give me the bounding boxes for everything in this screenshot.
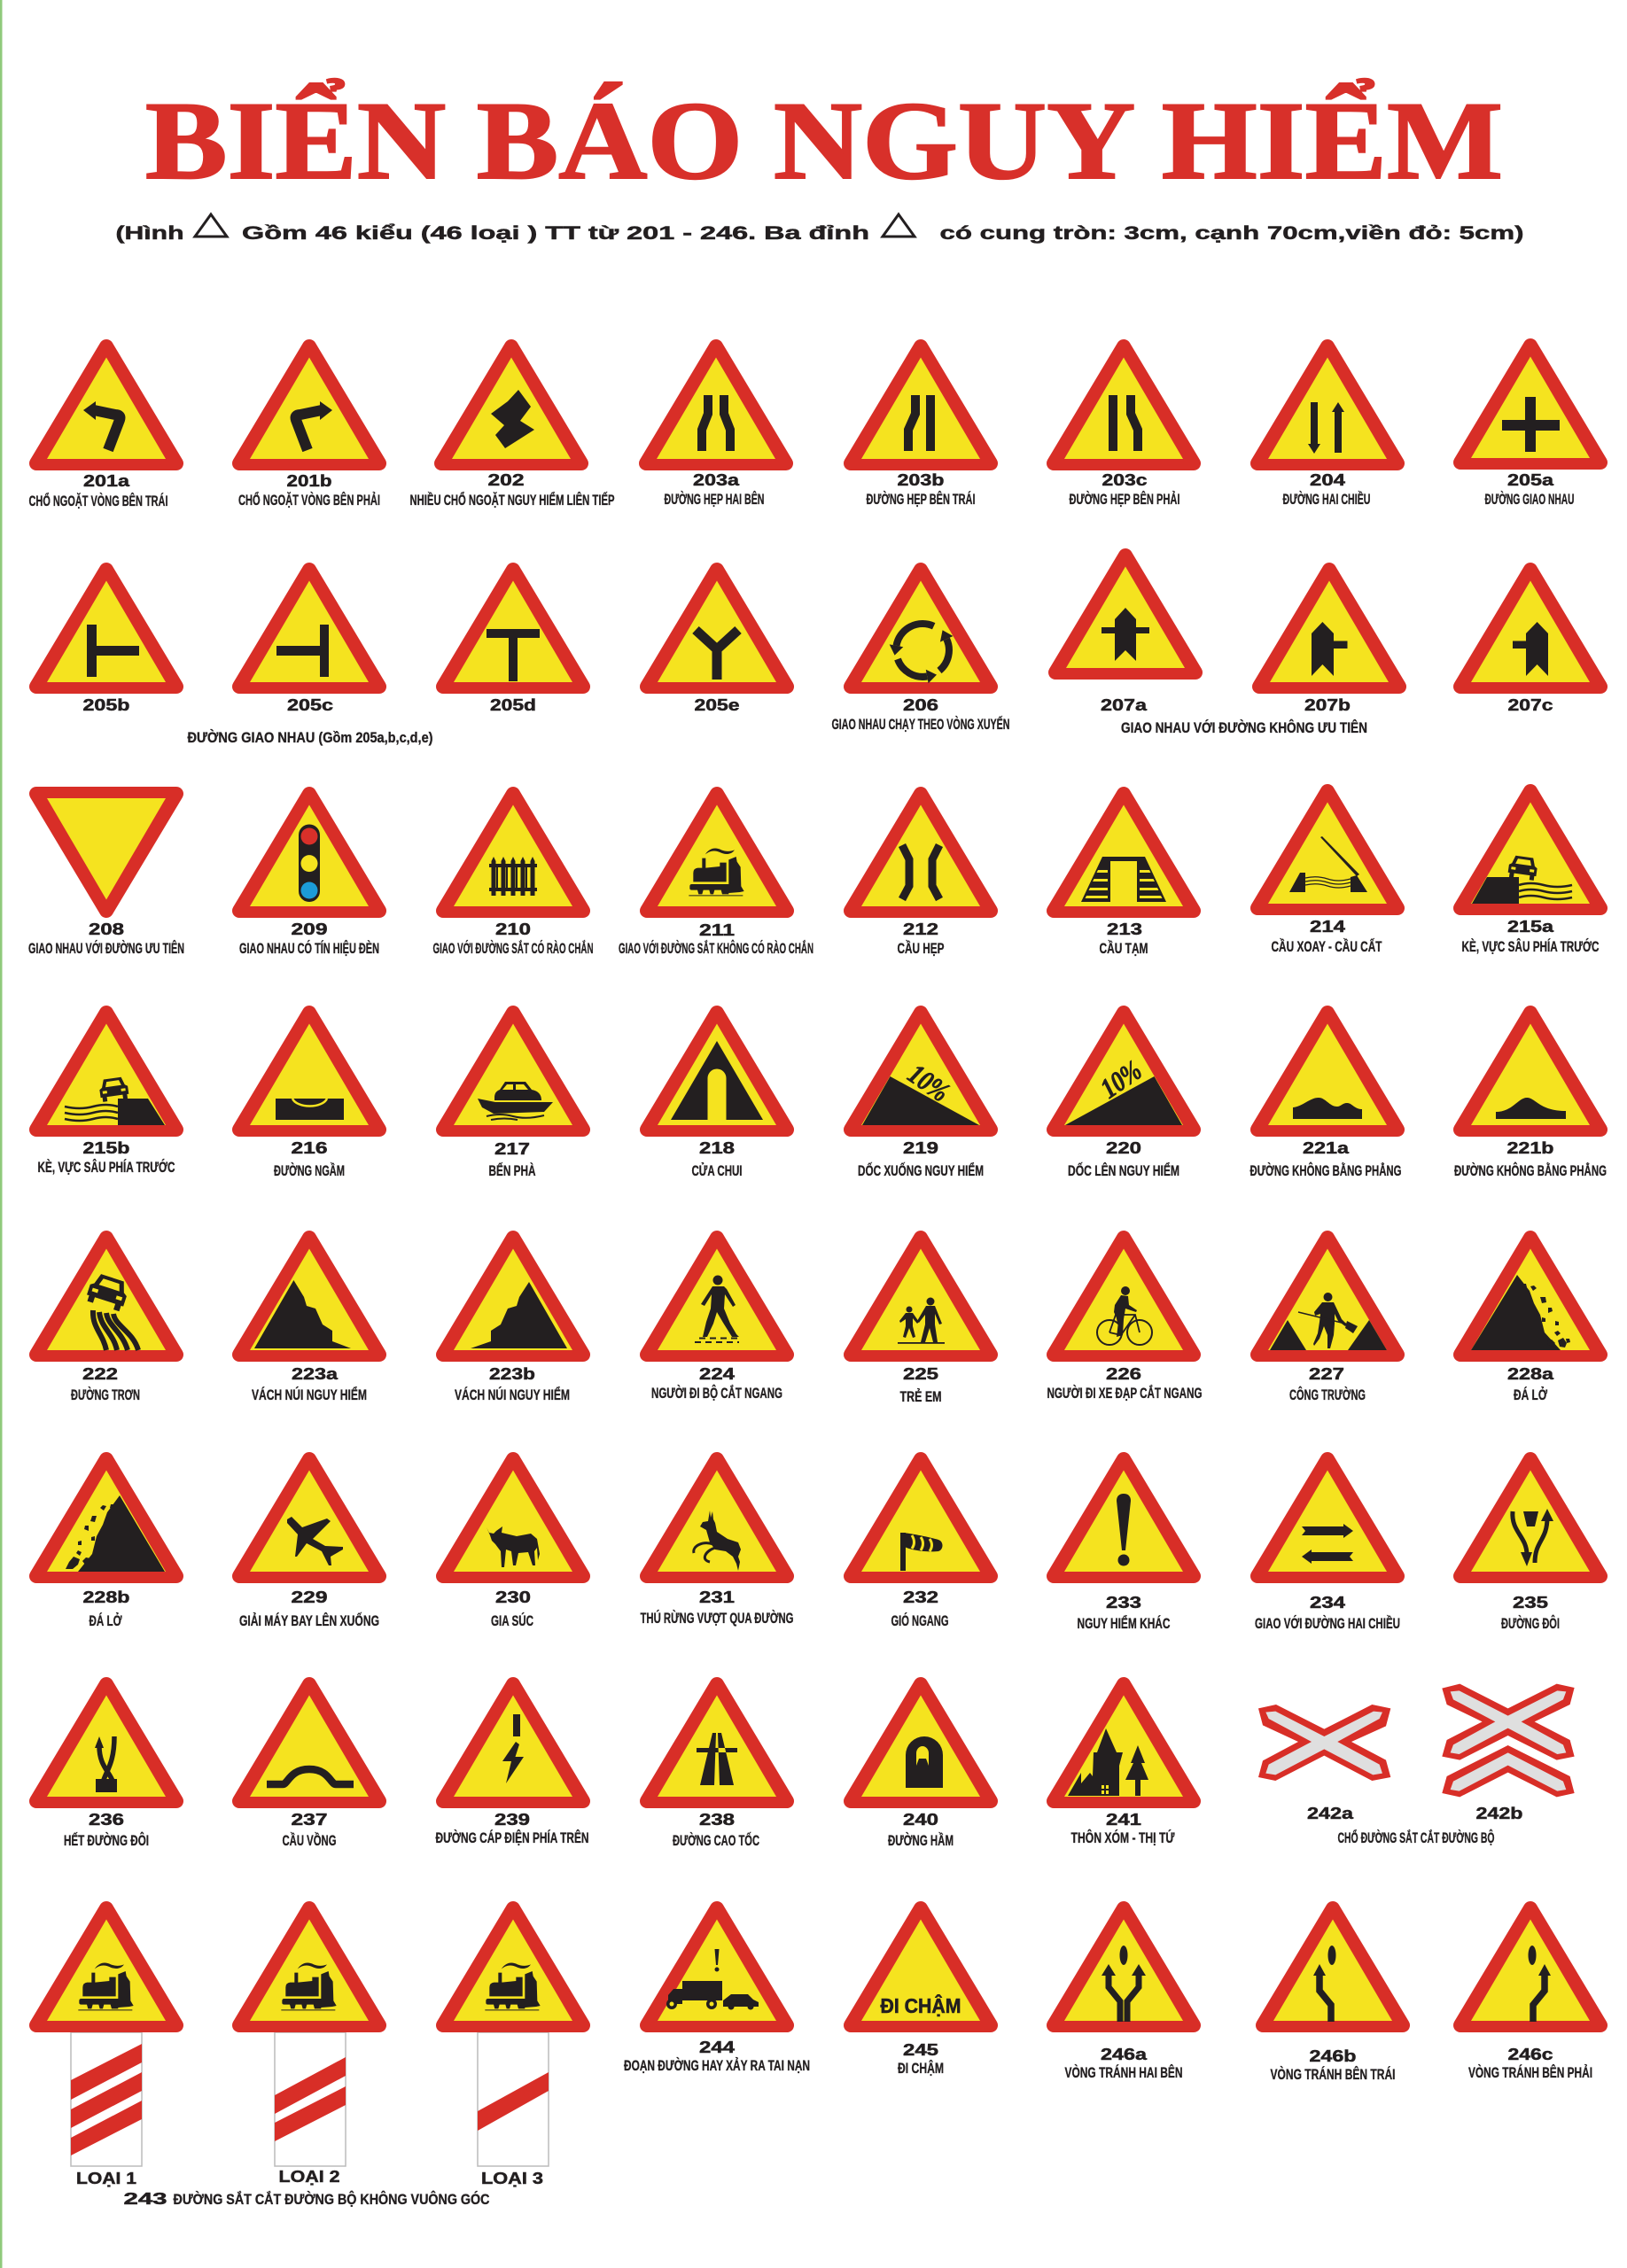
number: 242a (1307, 1805, 1354, 1822)
caption: GIẢI MÁY BAY LÊN XUỐNG (239, 1612, 379, 1629)
sign 213 (1054, 794, 1194, 957)
icon: steep ascent: 10% (1094, 1053, 1148, 1104)
subtitle (115, 214, 1524, 244)
icon: tunnel (851, 1684, 991, 1801)
subtitle: Gồm 46 kiểu (46 loại ) TT từ 201 - 246. Ba đỉnh (242, 223, 869, 244)
icon: two way crossing (1257, 1459, 1397, 1576)
caption: THÔN XÓM - THỊ TỨ (1070, 1829, 1175, 1846)
icon: slow text (851, 1908, 991, 2025)
number: 215a (1507, 918, 1554, 936)
caption: DỐC LÊN NGUY HIỂM (1068, 1161, 1179, 1179)
label: LOẠI 3 (481, 2170, 543, 2187)
number: 242b (1476, 1805, 1523, 1822)
icon: narrows both (646, 346, 786, 463)
number: 217 (494, 1140, 530, 1158)
caption: ĐƯỜNG HẦM (888, 1832, 954, 1849)
icon: inverted triangle (36, 794, 176, 911)
icon: traffic light (239, 794, 379, 911)
icon: overhead cable (443, 1684, 583, 1801)
label: LOẠI 2 (278, 2168, 340, 2186)
icon: roundabout (851, 570, 991, 687)
sign 209 (239, 794, 379, 957)
sign 206 (831, 570, 1010, 733)
caption: ĐI CHẬM (898, 2060, 944, 2077)
number: 226 (1106, 1365, 1141, 1383)
caption: ĐƯỜNG HẸP BÊN PHẢI (1069, 491, 1180, 508)
sign 223b (443, 1238, 583, 1403)
sign 232 (851, 1459, 991, 1629)
number: 207b (1304, 696, 1351, 714)
number: 221b (1506, 1139, 1554, 1157)
number: 237 (291, 1811, 328, 1829)
number: 206 (903, 696, 938, 714)
sign 245 (851, 1908, 991, 2077)
caption: CHỔ NGOẶT VÒNG BÊN TRÁI (28, 493, 168, 509)
icon: keep left (1263, 1908, 1403, 2025)
subtitle: (Hình (115, 223, 184, 244)
icon: quayside (1460, 791, 1600, 908)
number: 223b (489, 1365, 535, 1383)
icon: minor road right (1259, 570, 1399, 687)
icon: fence (443, 794, 583, 911)
sign 231 (640, 1459, 794, 1627)
icon: slippery road (36, 1238, 176, 1355)
icon: T junction (443, 570, 583, 687)
sign 228b (36, 1459, 176, 1629)
number: 246a (1101, 2046, 1148, 2063)
number: 214 (1310, 918, 1345, 936)
sign 241 (1054, 1684, 1194, 1846)
number: 212 (903, 920, 938, 938)
caption: TRẺ EM (900, 1388, 941, 1405)
icon: airplane (239, 1459, 379, 1576)
caption: KÈ, VỰC SÂU PHÍA TRƯỚC (37, 1159, 175, 1176)
icon: end of dual carriageway (36, 1684, 176, 1801)
caption: CẦU HẸP (897, 940, 945, 957)
number: 245 (903, 2041, 938, 2059)
number: 211 (699, 921, 735, 939)
sign 208 (28, 794, 184, 957)
sign 227 (1257, 1238, 1397, 1403)
icon: cattle (443, 1459, 583, 1576)
icon: train (239, 1908, 379, 2025)
sign 211 (619, 794, 814, 957)
sign 215a (1460, 791, 1600, 955)
caption: ĐƯỜNG HẸP HAI BÊN (665, 491, 764, 508)
sign 242a (1258, 1705, 1390, 1822)
icon: keep right (1460, 1908, 1600, 2025)
number: 228b (83, 1588, 130, 1606)
icon: cliff left (239, 1238, 379, 1355)
number: 204 (1310, 471, 1345, 489)
icon: side road left (239, 570, 379, 687)
sign 205c (239, 570, 379, 714)
caption: NGUY HIỂM KHÁC (1078, 1615, 1170, 1632)
number: 202 (487, 471, 525, 489)
caption: VÒNG TRÁNH BÊN TRÁI (1271, 2066, 1395, 2083)
number: 203c (1102, 471, 1147, 489)
number: 205b (83, 696, 130, 714)
number: 216 (291, 1139, 328, 1157)
icon: temporary bridge (1054, 794, 1194, 911)
sign 230 (443, 1459, 583, 1629)
icon: narrows left (851, 346, 991, 463)
sign 207b (1259, 570, 1399, 714)
number: 220 (1106, 1139, 1141, 1157)
number: 213 (1107, 920, 1142, 938)
number: 224 (699, 1365, 735, 1383)
number: 221a (1303, 1139, 1350, 1157)
number: 205a (1507, 471, 1554, 489)
sign 244 (624, 1908, 810, 2074)
sign 221b (1454, 1013, 1607, 1179)
sign 235 (1460, 1459, 1600, 1632)
caption: ĐƯỜNG CAO TỐC (673, 1831, 759, 1849)
sign 223a (239, 1238, 379, 1403)
caption: GIAO VỚI ĐƯỜNG SẮT KHÔNG CÓ RÀO CHẮN (619, 940, 814, 957)
sign 218 (647, 1013, 787, 1179)
post: three stripes (71, 2032, 142, 2166)
caption: NGƯỜI ĐI XE ĐẠP CẮT NGANG (1047, 1385, 1202, 1402)
caption: VÒNG TRÁNH HAI BÊN (1065, 2064, 1182, 2081)
number: 244 (699, 2039, 735, 2056)
sign 214 (1257, 791, 1397, 955)
sign 224 (647, 1238, 787, 1402)
number: 235 (1513, 1594, 1548, 1612)
sign 203c (1054, 346, 1194, 508)
icon: railway cross (1258, 1705, 1390, 1781)
icon: exclamation (1054, 1459, 1194, 1576)
icon: slow text: ĐI CHẬM (881, 1993, 961, 2017)
number: 207c (1508, 696, 1553, 714)
number: 241 (1106, 1811, 1141, 1829)
icon: crossroads (1460, 346, 1600, 462)
icon: train (647, 794, 787, 911)
sign 243 type 3 (443, 1908, 583, 2187)
number: 203b (897, 471, 945, 489)
caption: ĐƯỜNG KHÔNG BẰNG PHẲNG (1249, 1162, 1402, 1179)
caption: GIAO NHAU CÓ TÍN HIỆU ĐÈN (239, 940, 379, 957)
sign 217 (443, 1013, 583, 1179)
icon: steep descent: 10% (902, 1057, 955, 1107)
icon: minor crossroads (1055, 555, 1195, 672)
green left edge stripe (0, 0, 2, 2268)
icon: ford (239, 1013, 379, 1130)
sign 221a (1249, 1013, 1402, 1179)
caption: GIA SÚC (491, 1612, 533, 1629)
icon: roadworks (1257, 1238, 1397, 1355)
sign 202 (409, 346, 615, 509)
caption: CỬA CHUI (691, 1162, 743, 1179)
number: 223a (292, 1365, 339, 1383)
icon: curve left (36, 346, 176, 463)
number: 240 (903, 1811, 938, 1829)
number: 236 (89, 1811, 124, 1829)
caption: THÚ RỪNG VƯỢT QUA ĐƯỜNG (640, 1610, 794, 1627)
sign 246a (1054, 1908, 1194, 2081)
sign 205d (443, 570, 583, 714)
caption: NHIỀU CHỔ NGOẶT NGUY HIỂM LIÊN TIẾP (409, 492, 615, 509)
caption: ĐƯỜNG TRƠN (71, 1386, 140, 1403)
sign 236 (36, 1684, 176, 1849)
shared caption 207: GIAO NHAU VỚI ĐƯỜNG KHÔNG ƯU TIÊN (1121, 719, 1367, 736)
caption: CHỔ NGOẶT VÒNG BÊN PHẢI (238, 492, 380, 509)
icon: falling rocks right (1460, 1238, 1600, 1355)
number: 232 (903, 1588, 938, 1606)
number: 233 (1106, 1594, 1141, 1612)
sign 222 (36, 1238, 176, 1403)
number: 246b (1310, 2047, 1357, 2065)
icon: deer (647, 1459, 787, 1576)
icon: accident (647, 1908, 787, 2025)
number: 225 (903, 1365, 938, 1383)
caption: HẾT ĐƯỜNG ĐÔI (64, 1832, 149, 1849)
number: 205e (695, 696, 739, 714)
icon: dual carriageway (1460, 1459, 1600, 1576)
number: 201a (83, 472, 130, 490)
number: 231 (699, 1588, 735, 1606)
caption 243: 243 (124, 2190, 167, 2208)
sign 243 type 1 (36, 1908, 176, 2187)
icon: tunnel portal (647, 1013, 787, 1130)
number: 218 (699, 1139, 735, 1157)
caption: GIAO VỚI ĐƯỜNG SẮT CÓ RÀO CHẮN (432, 940, 594, 957)
sign 220 (1054, 1013, 1194, 1179)
caption 243: ĐƯỜNG SẮT CẮT ĐƯỜNG BỘ KHÔNG VUÔNG GÓC (174, 2191, 489, 2208)
number: 207a (1101, 696, 1148, 714)
icon: steep descent (851, 1013, 991, 1130)
icon: Y junction (647, 570, 787, 687)
sign 204 (1257, 346, 1397, 508)
number: 219 (903, 1139, 938, 1157)
number: 222 (82, 1365, 118, 1383)
number: 215b (83, 1139, 130, 1157)
caption: GIAO NHAU VỚI ĐƯỜNG ƯU TIÊN (28, 940, 184, 957)
icon: quayside mirrored (36, 1013, 176, 1130)
caption: VÁCH NÚI NGUY HIỂM (455, 1386, 570, 1403)
sign 229 (239, 1459, 379, 1629)
sign 205e (647, 570, 787, 714)
icon: steep ascent (1054, 1013, 1194, 1130)
caption: GIÓ NGANG (891, 1612, 948, 1629)
caption: ĐÁ LỞ (89, 1612, 122, 1629)
sign 243 type 2 (239, 1908, 379, 2186)
subtitle: có cung tròn: 3cm, cạnh 70cm,viền đỏ: 5cm) (939, 223, 1524, 244)
number: 210 (495, 920, 531, 938)
caption: CẦU XOAY - CẦU CẤT (1271, 938, 1382, 955)
number: 205d (490, 696, 536, 714)
caption: ĐƯỜNG HẸP BÊN TRÁI (867, 491, 975, 508)
sign 205a (1460, 346, 1600, 508)
shared caption 242: CHỔ ĐƯỜNG SẮT CẮT ĐƯỜNG BỘ (1338, 1829, 1494, 1846)
caption: ĐOẠN ĐƯỜNG HAY XẢY RA TAI NẠN (624, 2057, 810, 2074)
number: 228a (1507, 1365, 1554, 1383)
number: 229 (291, 1588, 328, 1606)
caption: ĐÁ LỞ (1514, 1386, 1547, 1403)
caption: GIAO NHAU CHẠY THEO VÒNG XUYẾN (831, 716, 1010, 733)
sign 212 (851, 794, 991, 957)
number: 239 (494, 1811, 530, 1829)
sign 246b (1263, 1908, 1403, 2083)
icon: cyclist (1054, 1238, 1194, 1355)
icon: uneven road (1257, 1013, 1397, 1130)
icon: side road right (36, 570, 176, 687)
sign 201b (238, 346, 380, 509)
icon: bump (1460, 1013, 1600, 1130)
icon: swing bridge (1257, 791, 1397, 908)
icon: double railway cross (1442, 1684, 1575, 1797)
icon: ferry (443, 1013, 583, 1130)
icon: two way arrows (1257, 346, 1397, 463)
sign 242b (1442, 1684, 1575, 1822)
icon: narrows right (1054, 346, 1194, 463)
sign 203a (646, 346, 786, 508)
icon: children (851, 1238, 991, 1355)
caption: ĐƯỜNG ĐÔI (1501, 1615, 1560, 1632)
shared caption 205: ĐƯỜNG GIAO NHAU (Gồm 205a,b,c,d,e) (188, 729, 432, 746)
caption: CẦU TẠM (1099, 940, 1148, 957)
caption: CẦU VỒNG (282, 1832, 337, 1849)
sign 226 (1047, 1238, 1202, 1402)
sign 203b (851, 346, 991, 508)
caption: VÁCH NÚI NGUY HIỂM (252, 1386, 367, 1403)
number: 203a (693, 471, 740, 489)
icon: train (36, 1908, 176, 2025)
number: 227 (1309, 1365, 1344, 1383)
caption: NGƯỜI ĐI BỘ CẮT NGANG (651, 1385, 782, 1402)
post: one stripe (478, 2032, 549, 2166)
caption: ĐƯỜNG HAI CHIỀU (1283, 491, 1370, 508)
sign 215b (36, 1013, 176, 1176)
sign 239 (436, 1684, 588, 1846)
icon: hump bridge (239, 1684, 379, 1801)
sign 237 (239, 1684, 379, 1849)
sign 207c (1460, 570, 1600, 714)
caption: GIAO VỚI ĐƯỜNG HAI CHIỀU (1255, 1615, 1400, 1632)
number: 234 (1310, 1594, 1345, 1612)
caption: CÔNG TRƯỜNG (1289, 1386, 1366, 1403)
sign 205b (36, 570, 176, 714)
number: 246c (1508, 2046, 1553, 2063)
sign 225 (851, 1238, 991, 1405)
sign 246c (1460, 1908, 1600, 2081)
post: two stripes (275, 2032, 346, 2166)
sign 219 (851, 1013, 991, 1179)
icon: windsock (851, 1459, 991, 1576)
icon: zigzag (441, 346, 581, 463)
sign 201a (28, 346, 176, 509)
number: 238 (699, 1811, 735, 1829)
number: 230 (495, 1588, 531, 1606)
icon: train (443, 1908, 583, 2025)
sign 233 (1054, 1459, 1194, 1632)
icon: pedestrian (647, 1238, 787, 1355)
icon: motorway (647, 1684, 787, 1801)
number: 201b (287, 472, 332, 490)
label: LOẠI 1 (76, 2170, 136, 2187)
number: 209 (291, 920, 328, 938)
caption: ĐƯỜNG NGẦM (274, 1162, 345, 1179)
number: 205c (287, 696, 333, 714)
icon: curve right (239, 346, 379, 463)
icon: village (1054, 1684, 1194, 1801)
caption: BẾN PHÀ (489, 1162, 535, 1179)
number: 208 (89, 920, 124, 938)
sign 234 (1255, 1459, 1400, 1632)
caption: ĐƯỜNG CÁP ĐIỆN PHÍA TRÊN (436, 1829, 588, 1846)
icon: fork (1054, 1908, 1194, 2025)
icon: minor road left (1460, 570, 1600, 687)
caption: DỐC XUỐNG NGUY HIỂM (858, 1161, 984, 1179)
sign 210 (432, 794, 594, 957)
sign 228a (1460, 1238, 1600, 1403)
sign 207a (1055, 555, 1195, 714)
sign 238 (647, 1684, 787, 1849)
sign 216 (239, 1013, 379, 1179)
title: BIỂN BÁO NGUY HIỂM (145, 78, 1503, 203)
icon: narrow bridge (851, 794, 991, 911)
icon: falling rocks left (36, 1459, 176, 1576)
sign 240 (851, 1684, 991, 1849)
icon: cliff right (443, 1238, 583, 1355)
